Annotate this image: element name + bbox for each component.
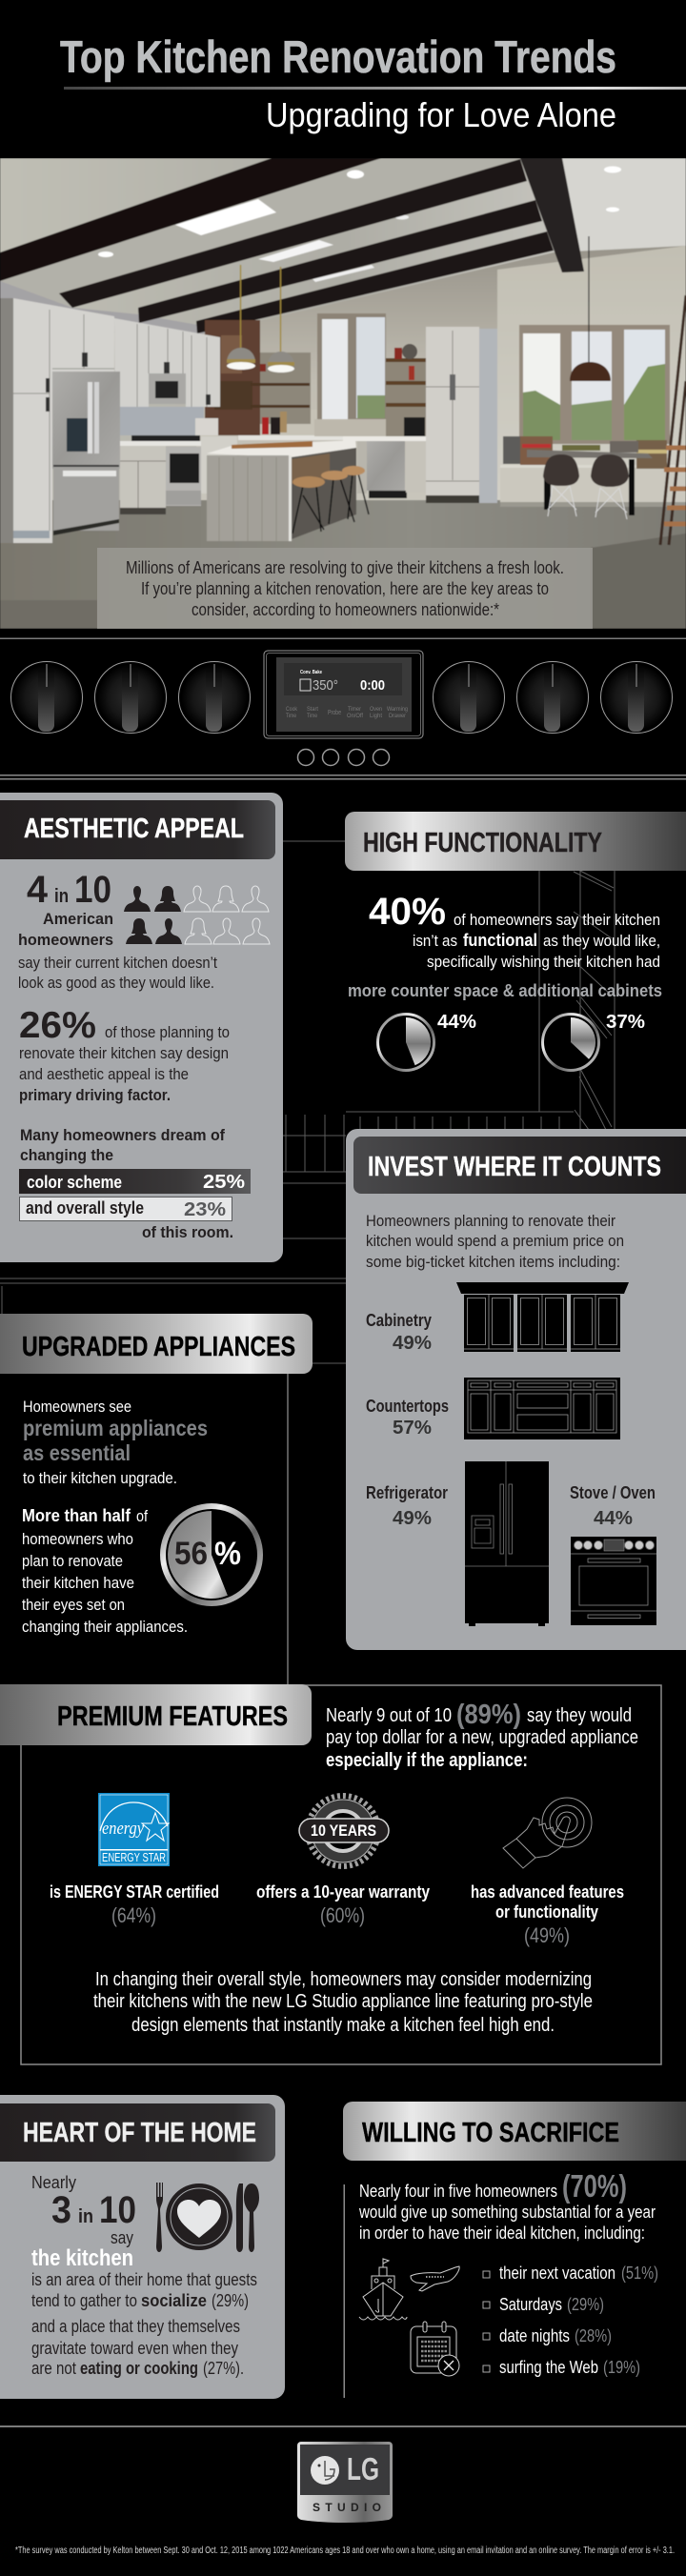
heading: invest where it counts [353, 1137, 686, 1194]
text: 89 percent: (89%) [456, 1700, 521, 1730]
checklist: date nights: date nights [499, 2326, 570, 2345]
heading: aesthetic appeal: AESTHETIC APPEAL [24, 814, 244, 844]
text: 89 percent: say they would [527, 1705, 632, 1726]
checklist: saturdays: (29%) [567, 2295, 604, 2314]
icon: base cabinets and countertop [464, 1378, 620, 1439]
stat: 26 percent [19, 1005, 230, 1104]
dome pendant [588, 236, 590, 363]
wall shelves [386, 360, 426, 436]
oven display: Oven [370, 707, 382, 713]
text: more than half: changing their appliances. [22, 1618, 188, 1636]
text: more than half [22, 1506, 188, 1636]
icon: refrigerator [465, 1461, 549, 1626]
microwave [149, 373, 186, 404]
text: socialize and gravitate: are not [31, 2359, 76, 2378]
stat: 4 in 10: homeowners [18, 931, 113, 949]
icon: 10 years warranty badge [299, 1796, 389, 1866]
heading: high functionality: HIGH FUNCTIONALITY [363, 828, 602, 858]
pie chart: 37 percent: 37% [606, 1012, 645, 1033]
text: 70 percent: (70%) [562, 2168, 627, 2204]
stat: 40 percent: as they would like, [543, 932, 660, 950]
text: current kitchen [18, 954, 217, 992]
checklist: surfing the web: (19%) [603, 2358, 640, 2377]
heading: premium features: PREMIUM FEATURES [57, 1701, 288, 1732]
text: socialize and gravitate: eating or cooking [80, 2359, 198, 2378]
shelves by brick [260, 352, 311, 424]
feature: energy star 64% [50, 1882, 219, 1927]
stat: 3 in 10: the kitchen [31, 2245, 133, 2271]
text: more than half: their kitchen have [22, 1574, 134, 1592]
icon: cabinets [456, 1282, 629, 1352]
text: LG Studio paragraph [93, 1969, 593, 2036]
panel: heart of the home [0, 2095, 285, 2399]
intro text panel: consider, according to homeowners nationwide:* [192, 600, 499, 619]
subtitle: Upgrading for Love Alone [266, 95, 616, 134]
oven display: Cook [286, 707, 298, 713]
text: socialize and gravitate: is an area of their home that guests [31, 2270, 257, 2289]
text: 89 percent: especially if the appliance: [326, 1750, 528, 1771]
text: LG Studio paragraph: design elements that instantly make a kitchen feel high end. [131, 2015, 555, 2036]
label: countertops 57%: 57% [393, 1418, 432, 1439]
brick column [205, 320, 260, 435]
stat: 26 percent: 26% [19, 1005, 96, 1046]
panel: invest where it counts [346, 1129, 686, 1650]
backsplash [120, 407, 204, 435]
stat: 3 in 10: in [78, 2206, 93, 2227]
text: socialize and gravitate: gravitate toward even when they [31, 2339, 238, 2358]
text: of this room: of this room. [142, 1223, 233, 1241]
heading: upgraded appliances [0, 1314, 313, 1374]
pie chart: 44 percent [377, 1012, 476, 1071]
intro text panel [97, 548, 593, 629]
checklist: date nights [483, 2326, 612, 2345]
stat: 4 in 10: 10 [74, 869, 111, 911]
text: 70 percent [358, 2168, 656, 2243]
text: more than half: of [136, 1507, 148, 1525]
oven display: Drawer [389, 714, 406, 719]
text: premium price [366, 1212, 624, 1271]
oven display: Warming [387, 707, 408, 713]
text: current kitchen: look as good as they would like. [18, 974, 214, 992]
icon: calendar crossed out [411, 2322, 459, 2376]
icon: touch hand [503, 1798, 592, 1868]
label: cabinetry 49% [366, 1311, 432, 1354]
heading: heart of the home: HEART OF THE HOME [23, 2118, 256, 2148]
oven display: Timer [348, 707, 361, 713]
text: dream of changing [20, 1126, 225, 1164]
pie chart: 56 percent: 56 [174, 1536, 208, 1572]
oven display: On/Off [347, 714, 363, 719]
back counter and splash [260, 410, 427, 435]
text: premium price: kitchen would spend a premium price on [366, 1232, 624, 1250]
label: refrigerator 49%: 49% [393, 1508, 432, 1529]
heading: upgraded appliances: UPGRADED APPLIANCES [22, 1332, 295, 1362]
stat: 3 in 10 [31, 2173, 136, 2271]
pie chart: 56 percent [163, 1506, 260, 1603]
checklist: vacation: (51%) [621, 2264, 658, 2283]
text: premium appliances as essential: premium appliances [23, 1416, 208, 1440]
background rack line art [0, 841, 615, 1684]
pie chart: 44 percent: 44% [437, 1012, 476, 1033]
text: dream of changing: changing the [20, 1146, 113, 1164]
bar: overall style 23%: 23% [184, 1199, 226, 1220]
intro text panel: Millions of Americans are resolving to give their kitchens a fresh look. [126, 558, 564, 577]
base cabinets [120, 441, 201, 446]
oven display [264, 651, 423, 738]
text: current kitchen: say their current kitchen doesn’t [18, 954, 217, 972]
bar: color scheme 25% [19, 1169, 251, 1194]
text: socialize and gravitate: and a place that they themselves [31, 2317, 240, 2336]
panel: aesthetic appeal [0, 793, 283, 1262]
label: cabinetry 49%: 49% [393, 1333, 432, 1354]
text: premium appliances as essential: to their kitchen upgrade. [23, 1469, 177, 1487]
oven display: Time [286, 714, 297, 719]
panel: willing to sacrifice [343, 2102, 686, 2398]
label: countertops 57%: Countertops [366, 1397, 449, 1416]
heading: premium features [0, 1684, 312, 1745]
heading: willing to sacrifice [343, 2102, 686, 2161]
footer [0, 2425, 686, 2556]
stat: 3 in 10: 10 [99, 2189, 136, 2231]
stat: 4 in 10: 4 [27, 869, 49, 911]
label: refrigerator 49%: Refrigerator [366, 1483, 448, 1502]
window bench [500, 465, 686, 503]
icon: energy star logo [98, 1793, 170, 1866]
checklist: surfing the web: surfing the Web [499, 2358, 598, 2377]
text: 89 percent [326, 1700, 638, 1771]
feature: advanced functionality 49%: (49%) [524, 1923, 570, 1947]
text: premium appliances as essential: Homeowners see [23, 1398, 131, 1416]
feature: warranty 60%: (60%) [320, 1903, 365, 1927]
intro text panel: If you’re planning a kitchen renovation, here are the key areas to [141, 579, 549, 598]
stat: 26 percent: of those planning to [105, 1023, 230, 1041]
feature: advanced functionality 49%: or functionality [495, 1902, 598, 1922]
subheading: counter space and cabinets: more counter space & additional cabinets [348, 981, 662, 1000]
oven display: 350° [313, 677, 338, 694]
upper cabinets [114, 318, 220, 407]
text: premium appliances as essential [23, 1398, 208, 1487]
stat: 40 percent: specifically wishing their kitchen had [427, 953, 660, 971]
stat: 3 in 10: Nearly [31, 2173, 76, 2192]
dining window [519, 325, 670, 444]
checklist: vacation: their next vacation [499, 2264, 615, 2283]
stove knobs [11, 661, 673, 734]
stat: 3 in 10: say [111, 2228, 133, 2247]
window one [317, 313, 386, 433]
indicator rings [297, 749, 389, 766]
bar stools [293, 473, 369, 533]
feature: warranty 60%: offers a 10-year warranty [256, 1882, 430, 1902]
tall left cabinets [0, 298, 13, 543]
stove control panel graphic [0, 629, 686, 779]
text: premium appliances as essential: as essential [23, 1440, 131, 1465]
feature: warranty 60% [256, 1882, 430, 1927]
stat: 40 percent: isn’t as [413, 932, 457, 950]
stat: 26 percent: primary driving factor. [19, 1086, 171, 1104]
label: stove / oven 44%: 44% [594, 1508, 633, 1529]
text: premium price: Homeowners planning to renovate their [366, 1212, 615, 1230]
icon: plate with heart and cutlery [156, 2183, 259, 2252]
text: socialize and gravitate: (29%) [212, 2291, 249, 2310]
label: stove / oven 44% [570, 1483, 656, 1529]
label: refrigerator 49% [366, 1483, 448, 1529]
text: socialize and gravitate: (27%). [203, 2359, 244, 2378]
stat: 4 in 10: American [43, 910, 113, 928]
text: socialize and gravitate [31, 2270, 257, 2378]
ladder [660, 295, 686, 545]
stat: 4 in 10: in [54, 886, 69, 907]
icon: people pictogram [124, 886, 270, 944]
dining table [527, 450, 653, 458]
stat: 40 percent: of homeowners say their kitchen [454, 911, 660, 929]
pendant lamps [240, 265, 280, 354]
logo: LG Studio [297, 2442, 393, 2523]
logo: LG Studio: STUDIO [313, 2501, 381, 2514]
heading: heart of the home [0, 2103, 275, 2162]
title block [60, 31, 686, 134]
stat: 40 percent: 40% [369, 891, 446, 933]
checklist: date nights: (28%) [575, 2326, 612, 2345]
icon: stove oven [571, 1537, 656, 1625]
oven display: Time [307, 714, 318, 719]
ceiling beams [0, 158, 381, 281]
icon: energy star logo: energy [102, 1819, 144, 1839]
refrigerator [52, 372, 120, 469]
bar: color scheme 25%: 25% [203, 1172, 245, 1193]
feature: energy star 64%: is ENERGY STAR certified [50, 1882, 219, 1902]
text: more than half: More than half [22, 1506, 131, 1525]
pie chart: 37 percent [543, 1012, 645, 1071]
text: premium price: some big-ticket kitchen items including: [366, 1253, 620, 1271]
heading: aesthetic appeal [0, 800, 275, 859]
stat: 26 percent: renovate their kitchen say design [19, 1044, 229, 1062]
skylights [175, 199, 276, 235]
label: stove / oven 44%: Stove / Oven [570, 1483, 656, 1502]
text: socialize and gravitate: socialize [141, 2291, 207, 2310]
text: 70 percent: Nearly four in five homeowners [359, 2182, 557, 2201]
checklist: saturdays: Saturdays [499, 2295, 562, 2314]
checklist: saturdays [483, 2295, 604, 2314]
oven display: Probe [328, 710, 341, 716]
bar: color scheme 25%: color scheme [27, 1173, 122, 1192]
stat: 40 percent: functional [463, 931, 537, 950]
text: more than half: homeowners who [22, 1530, 133, 1548]
pie chart: 56 percent: % [214, 1536, 241, 1572]
stat: 40 percent [369, 891, 660, 971]
icon: cruise ship [359, 2259, 407, 2320]
text: LG Studio paragraph: In changing their overall style, homeowners may consider modernizing [95, 1969, 592, 1990]
stat: 3 in 10: 3 [51, 2189, 71, 2231]
heading: willing to sacrifice: WILLING TO SACRIFICE [362, 2118, 619, 2148]
icon: airplane [411, 2266, 459, 2291]
text: LG Studio paragraph: their kitchens with the new LG Studio appliance line featuring pro-style [93, 1991, 593, 2012]
stat: 26 percent: and aesthetic appeal is the [19, 1065, 189, 1083]
floor [0, 500, 686, 629]
feature: advanced functionality 49% [471, 1882, 624, 1947]
oven display: Conv. Bake [300, 670, 322, 675]
tall cabinets [479, 329, 497, 503]
panel: high functionality [345, 812, 686, 1071]
icon: energy star logo: ENERGY STAR [102, 1850, 166, 1864]
logo: LG Studio: LG [347, 2451, 379, 2486]
text: socialize and gravitate: tend to gather to [31, 2291, 137, 2310]
panel: premium features [0, 1684, 661, 2064]
feature: energy star 64%: (64%) [111, 1903, 156, 1927]
heading: high functionality [345, 812, 686, 871]
text: more than half: their eyes set on [22, 1596, 125, 1614]
panel: upgraded appliances [0, 1314, 313, 1636]
text: dream of changing: Many homeowners dream of [20, 1126, 225, 1144]
bar: overall style 23%: and overall style [26, 1198, 144, 1218]
hero photo: kitchen interior illustration [0, 158, 686, 629]
oven display: Start [307, 707, 318, 713]
stat: 4 in 10 [18, 869, 113, 949]
icon: 10 years warranty badge: 10 YEARS [311, 1821, 376, 1840]
counter and dishwasher [343, 436, 427, 441]
text: 89 percent: Nearly 9 out of 10 [326, 1705, 452, 1726]
oven display: Light [370, 714, 382, 719]
oven display: 0:00 [360, 677, 385, 694]
kitchen island [207, 440, 356, 457]
dining chairs [543, 454, 579, 486]
feature: advanced functionality 49%: has advanced features [471, 1882, 624, 1902]
label: countertops 57% [366, 1397, 449, 1439]
text: more than half: plan to renovate [22, 1552, 123, 1570]
bar: overall style 23% [19, 1197, 232, 1221]
label: cabinetry 49%: Cabinetry [366, 1311, 432, 1330]
